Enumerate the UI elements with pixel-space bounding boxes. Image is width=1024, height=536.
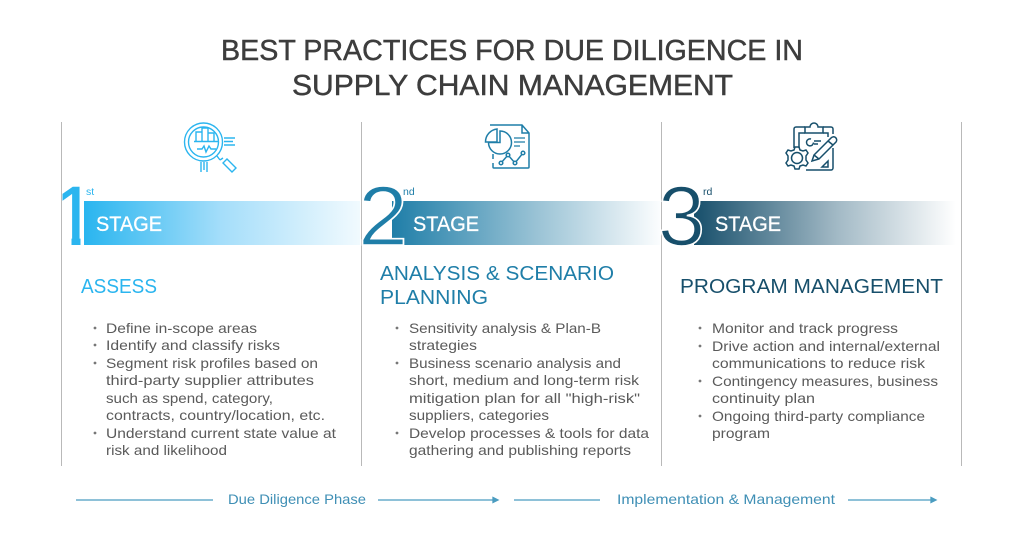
stage banner 3 <box>658 169 956 263</box>
bullet list: program management: Monitor and track progress <box>712 320 898 336</box>
icon: report document with pie chart <box>485 125 529 168</box>
stage banner 3: STAGE <box>715 213 781 236</box>
bullet list: analysis: strategies <box>409 337 477 353</box>
title <box>221 35 803 102</box>
panel: stage 2 analysis <box>358 125 660 458</box>
heading: program management: PROGRAM MANAGEMENT <box>680 276 943 298</box>
stage banner 1: 1 <box>51 169 98 263</box>
timeline: due diligence phase <box>76 491 498 507</box>
bullet list: assess: Segment risk profiles based on <box>106 355 318 371</box>
arrow: implementation <box>848 498 936 502</box>
bullet list: assess: Understand current state value at <box>106 425 336 441</box>
bullet list: program management: Ongoing third-party compliance <box>712 408 925 424</box>
timeline: implementation and management <box>514 491 936 507</box>
title: SUPPLY CHAIN MANAGEMENT <box>292 70 733 102</box>
bullet list: assess: contracts, country/location, etc. <box>106 407 325 423</box>
bullet list: assess: such as spend, category, <box>106 390 273 406</box>
bullet list: program management <box>699 320 940 441</box>
heading: assess: ASSESS <box>81 276 157 298</box>
icon: magnifying glass with chart <box>184 123 236 172</box>
stage banner 2 <box>358 169 660 263</box>
bullet list: assess: Define in-scope areas <box>106 320 257 336</box>
panel: stage 1 assess <box>51 123 360 458</box>
bullet list: analysis: Develop processes & tools for data <box>409 425 649 441</box>
panel: stage 3 program management <box>658 123 956 441</box>
bullet list: analysis: mitigation plan for all "high-risk" <box>409 390 640 406</box>
bullet list: analysis: Sensitivity analysis & Plan-B <box>409 320 601 336</box>
bullet list: analysis: Business scenario analysis and <box>409 355 621 371</box>
icon: clipboard with gear and pencil <box>786 123 837 170</box>
heading: analysis and scenario planning <box>380 263 614 309</box>
stage banner 1: st <box>86 186 94 198</box>
timeline: implementation and management: Implementation & Management <box>617 491 835 507</box>
timeline: due diligence phase: Due Diligence Phase <box>228 491 366 507</box>
stage banner 2: nd <box>403 186 415 198</box>
bullet list: program management: Contingency measures, business <box>712 373 938 389</box>
title: BEST PRACTICES FOR DUE DILIGENCE IN <box>221 35 803 67</box>
bullet list: program management: Drive action and internal/external <box>712 338 940 354</box>
bullet list: assess: risk and likelihood <box>106 442 227 458</box>
bullet list: assess: Identify and classify risks <box>106 337 280 353</box>
stage banner 3: 3 <box>658 169 705 263</box>
stage banner 2: 2 <box>358 169 408 263</box>
bullet list: program management: communications to reduce risk <box>712 355 926 371</box>
stage banner 3: rd <box>703 186 712 198</box>
heading: analysis and scenario planning: PLANNING <box>380 287 488 309</box>
bullet list: analysis: gathering and publishing reports <box>409 442 631 458</box>
bullet list: program management: continuity plan <box>712 390 815 406</box>
bullet list: program management: program <box>712 425 770 441</box>
bullet list: analysis <box>396 320 649 458</box>
heading: analysis and scenario planning: ANALYSIS & SCENARIO <box>380 263 614 285</box>
bullet list: analysis: suppliers, categories <box>409 407 549 423</box>
stage banner 1 <box>62 186 360 245</box>
arrow: due diligence <box>378 498 498 502</box>
stage banner 1: STAGE <box>96 213 162 236</box>
bullet list: analysis: short, medium and long-term risk <box>409 372 640 388</box>
bullet list: assess <box>94 320 336 458</box>
bullet list: assess: third-party supplier attributes <box>106 372 314 388</box>
stage banner 2: STAGE <box>413 213 479 236</box>
